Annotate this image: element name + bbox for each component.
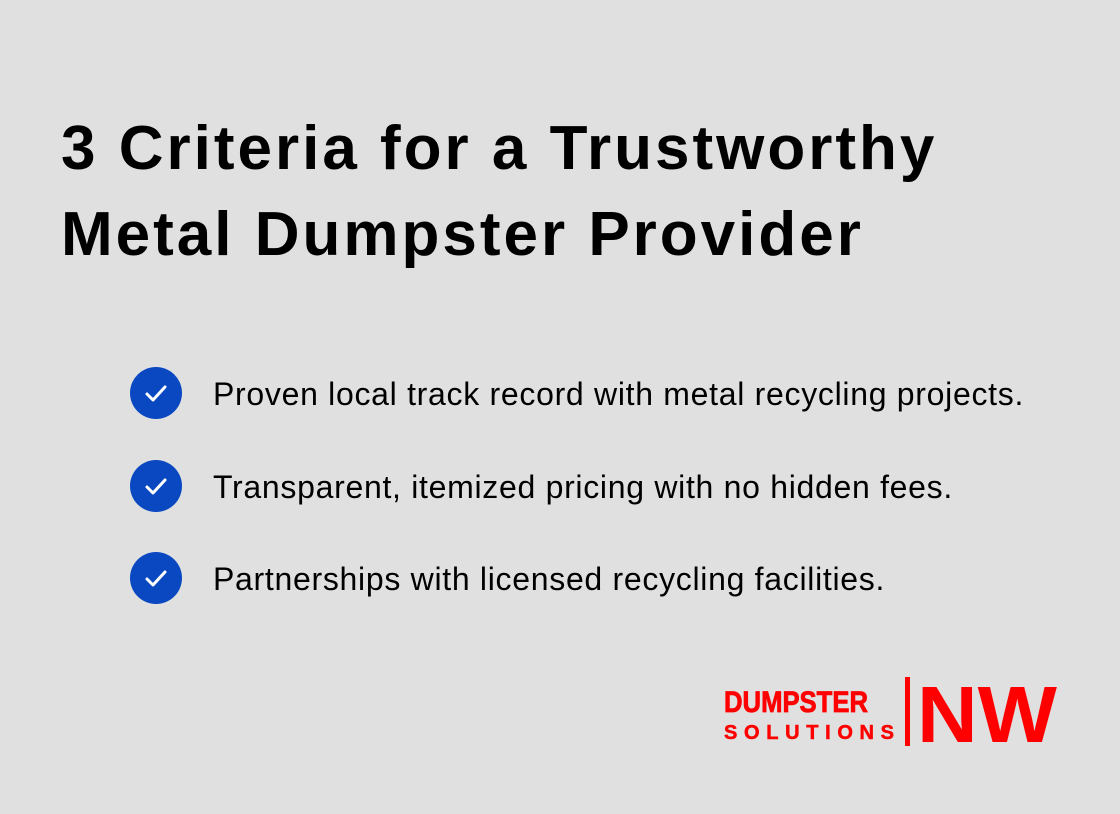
item 1: Proven local track record with metal recycling projects. bbox=[213, 376, 1024, 412]
item 2 bbox=[130, 460, 953, 512]
icon: check bbox=[130, 367, 182, 419]
item 1 bbox=[130, 367, 1024, 419]
logo: SOLUTIONS bbox=[724, 722, 894, 744]
item 2: Transparent, itemized pricing with no hidden fees. bbox=[213, 469, 953, 505]
item 3: Partnerships with licensed recycling facilities. bbox=[213, 561, 885, 597]
icon: check bbox=[130, 460, 182, 512]
title: Metal Dumpster Provider bbox=[61, 200, 864, 269]
logo: DUMPSTER bbox=[724, 686, 868, 719]
logo bbox=[724, 676, 1058, 748]
title: 3 Criteria for a Trustworthy bbox=[61, 114, 937, 183]
title bbox=[61, 114, 937, 269]
item 3 bbox=[130, 552, 885, 604]
icon: check bbox=[130, 552, 182, 604]
